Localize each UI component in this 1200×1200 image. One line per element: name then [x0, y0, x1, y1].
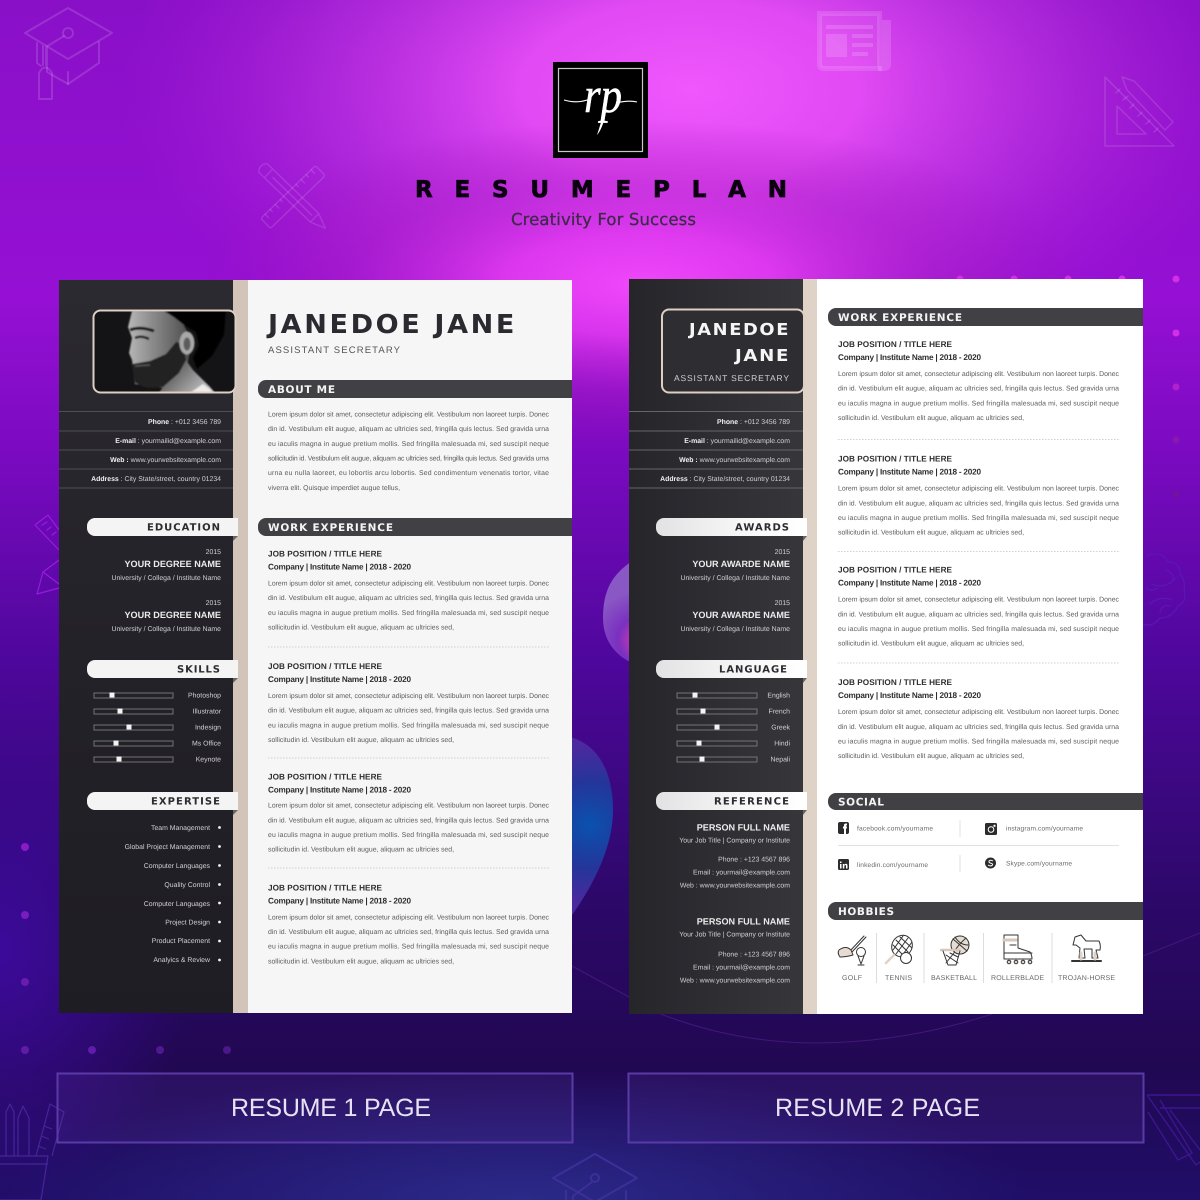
about me text: eu iaculis magna in augue pretium mollis. Sed fringilla malesuada mi, sed suscipit neque [268, 441, 549, 448]
skill bars: Ms Office [192, 740, 221, 748]
education entries [111, 549, 221, 633]
reference 2: Phone : +123 4567 896 [718, 952, 790, 958]
heading: reference [656, 792, 807, 815]
heading: hobbies: HOBBIES [838, 906, 894, 918]
heading: work experience: WORK EXPERIENCE [268, 522, 393, 534]
heading: social [828, 793, 1143, 810]
job entry 4: JOB POSITION / TITLE HERE [838, 678, 953, 687]
job entry 3: Lorem ipsum dolor sit amet, consectetur adipiscing elit. Vestibulum non laoreet turpis. Donec [268, 802, 550, 810]
heading: language: LANGUAGE [719, 664, 787, 676]
about me text: Lorem ipsum dolor sit amet, consectetur adipiscing elit. Vestibulum non laoreet turpis. Donec [268, 412, 550, 418]
job entry 4: Company | Institute Name | 2018 - 2020 [268, 896, 411, 906]
tennis label: TENNIS [885, 975, 912, 982]
reference 1: Phone : +123 4567 896 [718, 856, 790, 864]
panel: resume page 2 [629, 279, 1143, 1014]
education entries: YOUR DEGREE NAME [124, 610, 221, 620]
icon: pencil and ruler left [35, 515, 59, 594]
button: resume 1 page: RESUME 1 PAGE [231, 1094, 431, 1122]
tagline: Creativity For Success [511, 210, 696, 229]
job entry 1: Lorem ipsum dolor sit amet, consectetur adipiscing elit. Vestibulum non laoreet turpis. Donec [268, 580, 550, 588]
contact list: Phone : +012 3456 789 [148, 419, 221, 426]
job entry 2: Company | Institute Name | 2018 - 2020 [838, 468, 981, 476]
about me text: din id. Vestibulum elit augue, aliquam ac ultricies sed, fringilla quis lectus. Sed gravida urna [268, 426, 549, 433]
heading: expertise: EXPERTISE [151, 796, 220, 808]
job entry 1: JOB POSITION / TITLE HERE [838, 340, 953, 349]
education entries: 2015 [206, 549, 221, 556]
brand name: RESUMEPLAN [415, 177, 787, 203]
job entry 2: Lorem ipsum dolor sit amet, consectetur adipiscing elit. Vestibulum non laoreet turpis. Donec [268, 693, 550, 700]
job entry 3: sollicitudin id. Vestibulum elit augue, aliquam ac ultricies sed, [838, 640, 1024, 648]
award entries: 2015 [775, 600, 790, 607]
name box: JANEDOE [688, 320, 790, 339]
job entry 2: JOB POSITION / TITLE HERE [838, 454, 953, 464]
about me text [268, 412, 550, 492]
icon: trojan horse [1072, 935, 1101, 961]
reference 1: Email : yourmail@example.com [693, 870, 790, 876]
job entry 2: sollicitudin id. Vestibulum elit augue, aliquam ac ultricies sed, [268, 737, 454, 744]
contact list: Web : www.yourwebsitexample.com [679, 457, 790, 464]
award entries: 2015 [775, 549, 790, 556]
expertise list: Project Design [165, 920, 210, 926]
social links: linkedin.com/yourname [857, 862, 928, 869]
rollerblade label: ROLLERBLADE [991, 975, 1044, 982]
job entry 4: eu iaculis magna in augue pretium mollis. Sed fringilla malesuada mi, sed suscipit neque [838, 738, 1119, 746]
language bars: Hindi [774, 740, 790, 748]
job entry 2: din id. Vestibulum elit augue, aliquam ac ultricies sed, fringilla quis lectus. Sed gravida urna [838, 500, 1119, 508]
education entries: University / Collega / Institute Name [111, 626, 221, 633]
job entry 3: Company | Institute Name | 2018 - 2020 [838, 578, 981, 588]
education entries: University / Collega / Institute Name [111, 575, 221, 582]
expertise list [125, 825, 221, 964]
heading: work experience: WORK EXPERIENCE [838, 312, 962, 324]
job entry 4: Company | Institute Name | 2018 - 2020 [838, 691, 981, 700]
skill bars: Illustrator [193, 708, 222, 716]
skill bars: Indesign [195, 724, 221, 732]
reference 2: Your Job Title | Company or Institute [679, 932, 790, 938]
reference 2 [679, 916, 790, 984]
job entry 1: din id. Vestibulum elit augue, aliquam ac ultricies sed, fringilla quis lectus. Sed gravida urna [268, 595, 549, 602]
job entry 3: din id. Vestibulum elit augue, aliquam ac ultricies sed, fringilla quis lectus. Sed gravida urna [268, 818, 549, 824]
job entry 3: JOB POSITION / TITLE HERE [268, 772, 383, 782]
expertise list: Team Management [151, 825, 210, 832]
reference 2: PERSON FULL NAME [697, 916, 790, 926]
about me text: viverra elit. Quisque imperdiet augue tellus, [268, 485, 400, 492]
heading: expertise [87, 792, 238, 815]
job entry 4 [268, 884, 550, 966]
heading: about me: ABOUT ME [268, 384, 335, 396]
reference 2: Email : yourmail@example.com [693, 964, 790, 972]
heading: education: EDUCATION [147, 522, 220, 534]
icon: set square and pencil [1105, 77, 1174, 146]
heading: awards [656, 518, 807, 541]
button: resume 2 page [628, 1074, 1144, 1142]
contact list: Address : City State/street, country 01234 [91, 476, 221, 483]
job entry 1: Lorem ipsum dolor sit amet, consectetur adipiscing elit. Vestibulum non laoreet turpis. Donec [838, 371, 1120, 378]
job entry 4: din id. Vestibulum elit augue, aliquam ac ultricies sed, fringilla quis lectus. Sed gravida urna [838, 724, 1119, 731]
icon: basketball [941, 936, 969, 965]
skill bars: Photoshop [188, 692, 221, 700]
contact list: E-mail : yourmailid@example.com [684, 438, 790, 445]
education entries: YOUR DEGREE NAME [124, 559, 221, 569]
expertise list: Product Placement [152, 938, 210, 945]
job entry 4: Lorem ipsum dolor sit amet, consectetur adipiscing elit. Vestibulum non laoreet turpis. Donec [268, 914, 550, 922]
job entry 2: Lorem ipsum dolor sit amet, consectetur adipiscing elit. Vestibulum non laoreet turpis. Donec [838, 486, 1120, 492]
name box: JANE [734, 346, 790, 365]
name: JANEDOE JANE [266, 310, 517, 340]
skill bars [94, 692, 222, 764]
reference 1: Your Job Title | Company or Institute [679, 838, 790, 844]
job entry 3: Company | Institute Name | 2018 - 2020 [268, 786, 411, 794]
contact list [629, 412, 803, 488]
language bars: Greek [771, 724, 791, 732]
job entry 2: sollicitudin id. Vestibulum elit augue, aliquam ac ultricies sed, [838, 530, 1024, 536]
job entry 1: din id. Vestibulum elit augue, aliquam ac ultricies sed, fringilla quis lectus. Sed gravida urna [838, 386, 1119, 392]
icon: tennis [886, 931, 917, 964]
icon: newspaper [820, 14, 891, 71]
job entry 4: sollicitudin id. Vestibulum elit augue, aliquam ac ultricies sed, [268, 958, 454, 966]
job entry 2 [838, 454, 1120, 536]
job entry 1 [838, 340, 1120, 422]
job entry 1: sollicitudin id. Vestibulum elit augue, aliquam ac ultricies sed, [268, 624, 454, 632]
button: resume 1 page [58, 1074, 572, 1142]
job entry 2: din id. Vestibulum elit augue, aliquam ac ultricies sed, fringilla quis lectus. Sed gravida urna [268, 708, 549, 714]
heading: skills [87, 660, 238, 683]
job entry 2: eu iaculis magna in augue pretium mollis. Sed fringilla malesuada mi, sed suscipit neque [268, 722, 549, 730]
award entries [680, 549, 790, 633]
icon: crossed pencil and ruler [257, 162, 330, 233]
trojan horse label: TROJAN-HORSE [1058, 975, 1115, 982]
reference 1: PERSON FULL NAME [697, 822, 790, 832]
job entry 1: sollicitudin id. Vestibulum elit augue, aliquam ac ultricies sed, [838, 415, 1024, 422]
expertise list: Quality Control [164, 882, 210, 889]
job entry 3: eu iaculis magna in augue pretium mollis. Sed fringilla malesuada mi, sed suscipit neque [838, 626, 1119, 633]
job entry 4: JOB POSITION / TITLE HERE [268, 884, 383, 892]
job entry 3: sollicitudin id. Vestibulum elit augue, aliquam ac ultricies sed, [268, 846, 454, 854]
icon: brain [1143, 554, 1185, 625]
icon: golf [838, 936, 866, 965]
social links: instagram.com/yourname [1006, 826, 1083, 832]
job entry 1: JOB POSITION / TITLE HERE [268, 550, 383, 558]
heading: social: SOCIAL [838, 796, 884, 808]
reference 1: Web : www.yourwebsitexample.com [680, 882, 790, 890]
heading: about me [258, 380, 572, 398]
job entry 3: din id. Vestibulum elit augue, aliquam ac ultricies sed, fringilla quis lectus. Sed gravida urna [838, 612, 1119, 618]
job entry 3: eu iaculis magna in augue pretium mollis. Sed fringilla malesuada mi, sed suscipit neque [268, 832, 549, 839]
button: resume 2 page: RESUME 2 PAGE [775, 1094, 980, 1122]
logo [553, 62, 648, 158]
icon: graduation cap bottom [553, 1154, 637, 1200]
job entry 4: Lorem ipsum dolor sit amet, consectetur adipiscing elit. Vestibulum non laoreet turpis. Donec [838, 709, 1120, 716]
job entry 4 [838, 678, 1120, 760]
job title: ASSISTANT SECRETARY [268, 345, 401, 356]
contact list [59, 412, 233, 488]
expertise list: Computer Languages [144, 901, 211, 908]
icon: set square bottom right [1147, 1095, 1200, 1165]
heading: work experience [258, 518, 572, 536]
job entry 2: JOB POSITION / TITLE HERE [268, 662, 383, 671]
job entry 2: Company | Institute Name | 2018 - 2020 [268, 675, 411, 684]
icon: pencil cup [0, 1104, 64, 1200]
job entry 3 [268, 772, 550, 854]
job entry 4: sollicitudin id. Vestibulum elit augue, aliquam ac ultricies sed, [838, 753, 1024, 760]
icon: graduation cap [25, 8, 112, 99]
social links: Skype.com/yourname [1006, 860, 1072, 868]
job entry 4: din id. Vestibulum elit augue, aliquam ac ultricies sed, fringilla quis lectus. Sed gravida urna [268, 929, 549, 936]
award entries: YOUR AWARDE NAME [692, 559, 790, 569]
job entry 1 [268, 550, 550, 632]
about me text: urna eu nulla laoreet, eu lobortis arcu lobortis. Sed condimentum venenatis tortor, vitae [268, 470, 549, 477]
social links: facebook.com/yourname [857, 826, 933, 832]
language bars: Nepali [770, 756, 790, 764]
hobbies dividers [876, 933, 1052, 983]
language bars: French [769, 708, 790, 716]
reference 2: Web : www.yourwebsitexample.com [680, 978, 790, 984]
award entries: University / Collega / Institute Name [680, 626, 790, 633]
heading: language [656, 660, 807, 683]
panel: resume page 1 [59, 280, 572, 1013]
name box [662, 310, 804, 392]
heading: skills: SKILLS [177, 664, 220, 676]
about me text: sollicitudin id. Vestibulum elit augue, aliquam ac ultricies sed, fringilla quis lectus. Sed gravida urna [268, 456, 549, 462]
decorative blobs [570, 561, 632, 918]
golf label: GOLF [842, 975, 862, 982]
heading: hobbies [828, 902, 1143, 920]
basketball label: BASKETBALL [931, 975, 977, 982]
reference 1 [679, 822, 790, 890]
heading: reference: REFERENCE [714, 796, 789, 808]
job entry 2 [268, 662, 550, 744]
contact list: Address : City State/street, country 01234 [660, 476, 790, 483]
award entries: University / Collega / Institute Name [680, 575, 790, 582]
job entry 3 [838, 566, 1120, 648]
language bars: English [767, 692, 790, 700]
award entries: YOUR AWARDE NAME [692, 610, 790, 620]
icon: rollerblade [1004, 935, 1032, 964]
expertise list: Global Project Management [125, 844, 210, 851]
job entry 1: eu iaculis magna in augue pretium mollis. Sed fringilla malesuada mi, sed suscipit neque [268, 610, 549, 617]
expertise list: Analyics & Review [153, 957, 210, 964]
decorative dots [21, 276, 1180, 1054]
contact list: Phone : +012 3456 789 [717, 419, 790, 426]
job entry 1: eu iaculis magna in augue pretium mollis. Sed fringilla malesuada mi, sed suscipit neque [838, 400, 1119, 408]
job entry 2: eu iaculis magna in augue pretium mollis. Sed fringilla malesuada mi, sed suscipit neque [838, 515, 1119, 522]
logo: rp [584, 67, 622, 123]
decorative curves [572, 933, 1200, 1043]
skill bars: Keynote [196, 756, 221, 764]
language bars [677, 692, 791, 764]
contact list: Web : www.yourwebsitexample.com [110, 457, 221, 464]
job entry 1: Company | Institute Name | 2018 - 2020 [838, 353, 981, 362]
heading: education [87, 518, 238, 541]
photo portrait [94, 309, 236, 394]
job entry 3: JOB POSITION / TITLE HERE [838, 566, 953, 574]
job entry 4: eu iaculis magna in augue pretium mollis. Sed fringilla malesuada mi, sed suscipit neque [268, 944, 549, 950]
job entry 3: Lorem ipsum dolor sit amet, consectetur adipiscing elit. Vestibulum non laoreet turpis. Donec [838, 596, 1120, 604]
name box: ASSISTANT SECRETARY [674, 373, 789, 383]
job entry 1: Company | Institute Name | 2018 - 2020 [268, 562, 411, 572]
education entries: 2015 [206, 600, 221, 607]
contact list: E-mail : yourmailid@example.com [115, 438, 221, 445]
expertise list: Computer Languages [144, 863, 211, 870]
heading: awards: AWARDS [735, 522, 789, 534]
social links [838, 820, 1119, 872]
heading: work experience [828, 308, 1143, 326]
